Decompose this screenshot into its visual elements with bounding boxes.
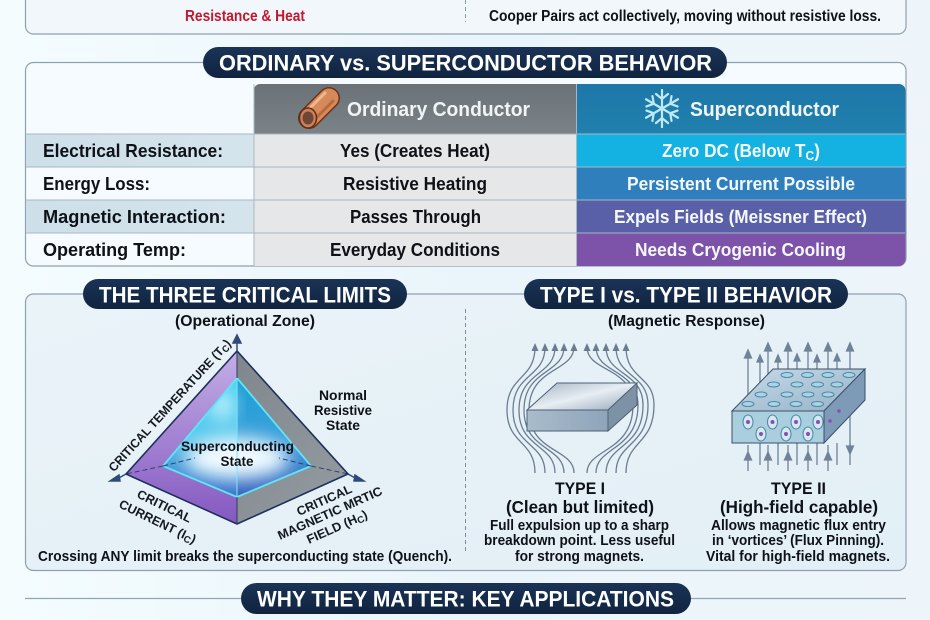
- column: superconductor: Persistent Current Possible: [627, 173, 855, 194]
- text: resistance and heat: Resistance & Heat: [185, 8, 305, 25]
- column: ordinary conductor: Ordinary Conductor: [347, 98, 530, 121]
- text: type II description: [706, 480, 890, 565]
- label: superconducting state: Superconducting: [181, 438, 294, 454]
- arrow: temperature axis: [233, 335, 241, 351]
- label: critical current: CRITICAL: [135, 487, 194, 526]
- arrow: field axis: [348, 474, 364, 481]
- panel: comparison table: [26, 47, 906, 266]
- label: critical temperature: C: [220, 343, 233, 355]
- label: critical temperature: ): [221, 337, 234, 349]
- note: quench: Crossing ANY limit breaks the superconducting state (Quench).: [38, 548, 452, 565]
- text: type II description: TYPE II: [771, 480, 826, 498]
- column: superconductor: Zero DC (Below T: [662, 140, 816, 161]
- label: critical magnetic field: CRITICAL: [295, 482, 354, 519]
- column: superconductor: Needs Cryogenic Cooling: [635, 239, 846, 260]
- label: critical magnetic field: FIELD (H: [305, 512, 358, 547]
- column: superconductor: [576, 84, 906, 266]
- text: type I description: breakdown point. Less useful: [484, 533, 675, 549]
- row labels column: Operating Temp:: [43, 240, 186, 260]
- column: ordinary conductor: Everyday Conditions: [330, 239, 500, 260]
- text: type I description: TYPE I: [555, 480, 605, 498]
- label: critical temperature: CRITICAL TEMPERATURE (T: [106, 339, 232, 475]
- label: critical magnetic field: MAGNETIC MRTIC: [276, 484, 384, 543]
- column: superconductor: Superconductor: [690, 98, 839, 121]
- subtitle: operational zone: (Operational Zone): [175, 313, 315, 330]
- label: critical current: CURRENT (I: [117, 497, 188, 541]
- column: ordinary conductor: Passes Through: [350, 206, 481, 227]
- text: type I description: (Clean but limited): [506, 497, 654, 517]
- text: type II description: Vital for high-field magnets.: [706, 549, 890, 565]
- text: type II description: (High-field capable): [720, 497, 878, 517]
- label: normal resistive state: [314, 387, 372, 433]
- text: type I description: [484, 480, 675, 565]
- label: normal resistive state: Normal: [319, 387, 367, 403]
- heading: three critical limits: THE THREE CRITICAL LIMITS: [99, 282, 391, 308]
- label: superconducting state: [181, 438, 294, 469]
- text: type II description: in ‘vortices’ (Flux Pinning).: [712, 533, 884, 549]
- heading: type I vs type II: TYPE I vs. TYPE II BEHAVIOR: [540, 282, 832, 308]
- column: superconductor: C: [806, 148, 815, 163]
- diagram: type II flux vortices: [732, 343, 865, 471]
- subtitle: magnetic response: (Magnetic Response): [608, 313, 765, 330]
- column: ordinary conductor: [254, 84, 576, 266]
- row labels column: [26, 134, 254, 260]
- icon: snowflake: [643, 90, 681, 127]
- text: type I description: for strong magnets.: [515, 549, 644, 565]
- arrow: current axis: [110, 474, 126, 481]
- text: type I description: Full expulsion up to a sharp: [490, 518, 669, 534]
- heading: ordinary vs superconductor: ORDINARY vs. SUPERCONDUCTOR BEHAVIOR: [219, 50, 712, 76]
- row labels column: Electrical Resistance:: [43, 141, 223, 161]
- column: superconductor: Expels Fields (Meissner Effect): [614, 206, 867, 227]
- column: ordinary conductor: Resistive Heating: [343, 173, 487, 194]
- column: ordinary conductor: Yes (Creates Heat): [340, 140, 490, 161]
- text: cooper pairs: Cooper Pairs act collectively, moving without resistive loss.: [489, 8, 881, 25]
- label: superconducting state: State: [220, 453, 254, 469]
- heading: key applications: WHY THEY MATTER: KEY APPLICATIONS: [257, 586, 674, 612]
- label: normal resistive state: State: [326, 417, 360, 433]
- panel: top summary: [26, 0, 906, 34]
- column: superconductor: ): [814, 140, 820, 161]
- chart: critical limits pyramid: [106, 335, 384, 549]
- row labels column: Energy Loss:: [43, 174, 150, 194]
- row labels column: Magnetic Interaction:: [43, 207, 226, 227]
- panel: limits and type behaviour: [26, 279, 906, 570]
- label: critical magnetic field: C: [356, 514, 367, 527]
- icon: copper wire: [300, 93, 333, 128]
- label: critical current: [116, 487, 198, 548]
- label: critical magnetic field: ): [360, 508, 370, 522]
- text: type II description: Allows magnetic flux entry: [711, 518, 886, 534]
- label: critical current: ): [188, 532, 198, 547]
- label: normal resistive state: Resistive: [314, 402, 372, 418]
- diagram: type I flux expulsion: [507, 343, 654, 473]
- label: critical current: C: [181, 534, 192, 547]
